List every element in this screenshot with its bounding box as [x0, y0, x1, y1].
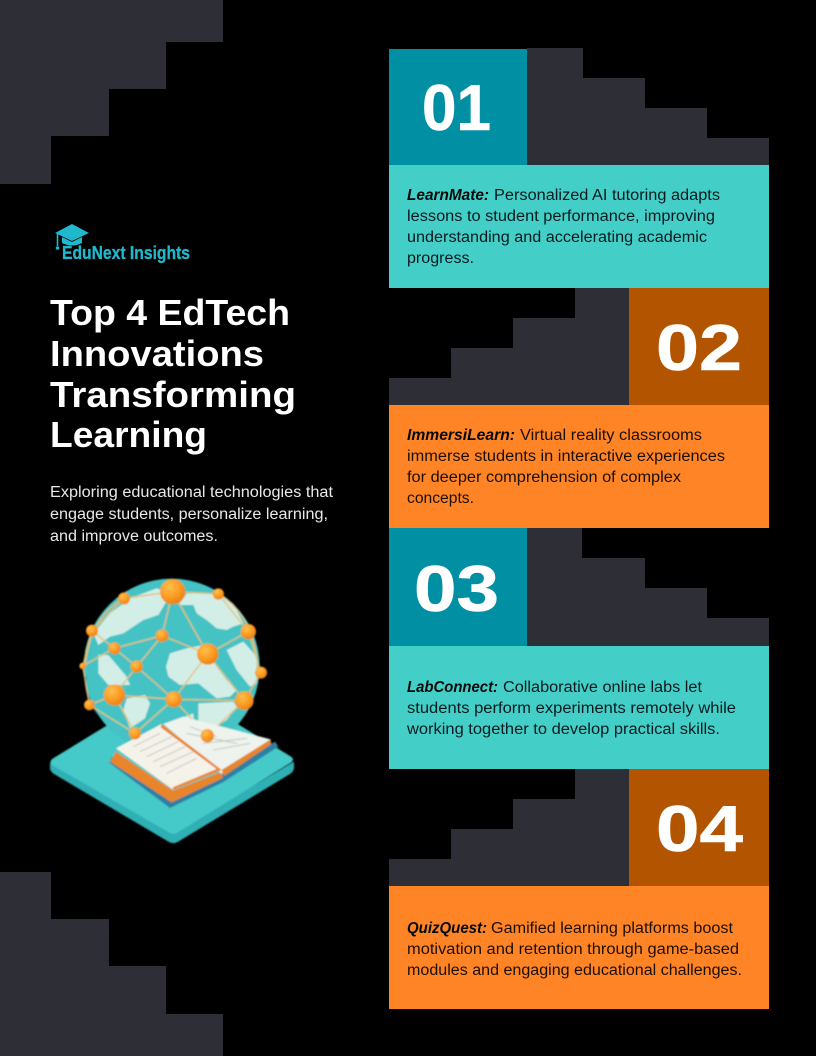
text card 04: motivation and retention through game-based: [407, 941, 739, 958]
text card 03: [389, 646, 769, 769]
text card 03: Collaborative online labs let: [503, 679, 703, 696]
text card 02: ImmersiLearn:: [407, 427, 515, 444]
text card 02: for deeper comprehension of complex: [407, 469, 681, 486]
network nodes: [79, 579, 267, 710]
title: Transforming: [50, 374, 296, 415]
intro paragraph: Exploring educational technologies that: [50, 484, 334, 501]
text card 02: Virtual reality classrooms: [520, 427, 702, 444]
text card 04: [389, 886, 769, 1009]
number box 01: 01: [422, 71, 491, 144]
number box 02: [629, 288, 769, 405]
text card 01: [389, 165, 769, 288]
platform: [50, 686, 294, 843]
item 04: [389, 769, 769, 1009]
logo: EduNext Insights: [55, 224, 190, 263]
text card 02: concepts.: [407, 490, 474, 507]
text card 01: Personalized AI tutoring adapts: [494, 187, 720, 204]
icon: graduation cap: [55, 224, 89, 250]
text card 04: QuizQuest:: [407, 920, 487, 937]
intro paragraph: [50, 484, 334, 545]
front nodes: [129, 727, 214, 742]
text card 01: progress.: [407, 250, 474, 267]
text card 03: working together to develop practical skills.: [406, 721, 720, 738]
text card 01: understanding and accelerating academic: [407, 229, 707, 246]
decorative stairs: bottom left: [0, 872, 223, 1056]
text card 04: Gamified learning platforms boost: [491, 920, 734, 937]
text card 03: students perform experiments remotely while: [407, 700, 736, 717]
title: [50, 292, 296, 455]
open book: [109, 717, 278, 808]
text card 02: immerse students in interactive experiences: [407, 448, 725, 465]
item 01: [389, 48, 769, 288]
text card 01: LearnMate:: [407, 187, 489, 204]
network lines: [83, 592, 261, 736]
title: Top 4 EdTech: [50, 292, 290, 333]
stairs 03: [527, 528, 769, 646]
number box 01: [389, 49, 527, 165]
text card 04: modules and engaging educational challenges.: [407, 962, 742, 979]
brand name: EduNext Insights: [62, 243, 190, 263]
text card 01: lessons to student performance, improving: [407, 208, 715, 225]
title: Innovations: [50, 333, 264, 374]
globe: [82, 578, 261, 729]
number box 04: [629, 769, 769, 886]
number box 04: 04: [656, 792, 743, 865]
intro paragraph: engage students, personalize learning,: [50, 506, 328, 523]
text card 03: LabConnect:: [407, 679, 498, 696]
title: Learning: [50, 414, 207, 455]
illustration: globe network on open book: [50, 579, 294, 843]
number box 03: 03: [414, 552, 499, 625]
item 02: [389, 288, 769, 528]
text card 02: [389, 405, 769, 528]
stairs 04: [389, 769, 629, 886]
stairs 01: [527, 48, 769, 165]
intro paragraph: and improve outcomes.: [50, 528, 218, 545]
decorative stairs: top left: [0, 0, 223, 184]
number box 03: [389, 528, 527, 646]
stairs 02: [389, 288, 629, 405]
item 03: [389, 528, 769, 769]
number box 02: 02: [656, 311, 742, 384]
